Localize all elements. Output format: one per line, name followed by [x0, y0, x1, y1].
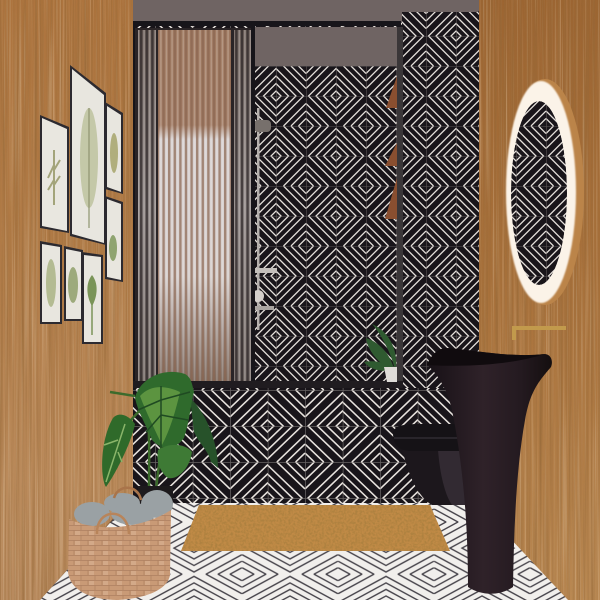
leaf: veins and splits [138, 386, 190, 448]
front handle [97, 514, 129, 534]
shower recess tile wall [254, 66, 400, 382]
coir door mat [181, 505, 450, 551]
right wood wall [479, 0, 600, 600]
back wall tiles [125, 10, 485, 510]
oval backlit mirror [506, 79, 584, 305]
shower fixture [252, 108, 277, 330]
brass wall tap [514, 328, 566, 340]
leaf: left [102, 415, 135, 487]
leaf: right [190, 398, 218, 468]
back handle [114, 488, 141, 500]
print: frame 1 [40, 115, 69, 233]
small potted plant [364, 324, 397, 382]
left wood wall [0, 0, 133, 600]
leaf: left veins [104, 424, 125, 482]
print: frame 4 [105, 196, 123, 282]
shower ledge [131, 381, 403, 388]
wicker basket with towels [68, 488, 173, 600]
basket body [68, 510, 171, 600]
floor [40, 503, 600, 600]
lower tile wall [127, 388, 479, 504]
towel rolls [74, 490, 173, 526]
black pedestal sink [427, 348, 552, 594]
recess corner post [397, 27, 403, 387]
leaf: lower centre [157, 445, 192, 478]
leaf: large top [135, 372, 194, 448]
wall niche shelves [385, 76, 397, 219]
leaf: highlight [140, 387, 180, 445]
print: frame 7 [82, 252, 103, 344]
print: frame 2 [70, 65, 106, 245]
shower recess ceiling [254, 27, 400, 66]
pot [138, 486, 173, 504]
print: frame 5 [40, 241, 62, 324]
print: frame 3 [105, 102, 123, 194]
stems [110, 392, 162, 490]
monstera plant [102, 372, 218, 504]
ribbed glass shower screen [131, 24, 255, 386]
ceiling [125, 0, 486, 26]
gallery of framed botanical prints [40, 65, 123, 344]
print: frame 6 [64, 246, 83, 321]
tile column right of the recess [402, 12, 479, 390]
wall-hung black toilet [393, 424, 468, 505]
